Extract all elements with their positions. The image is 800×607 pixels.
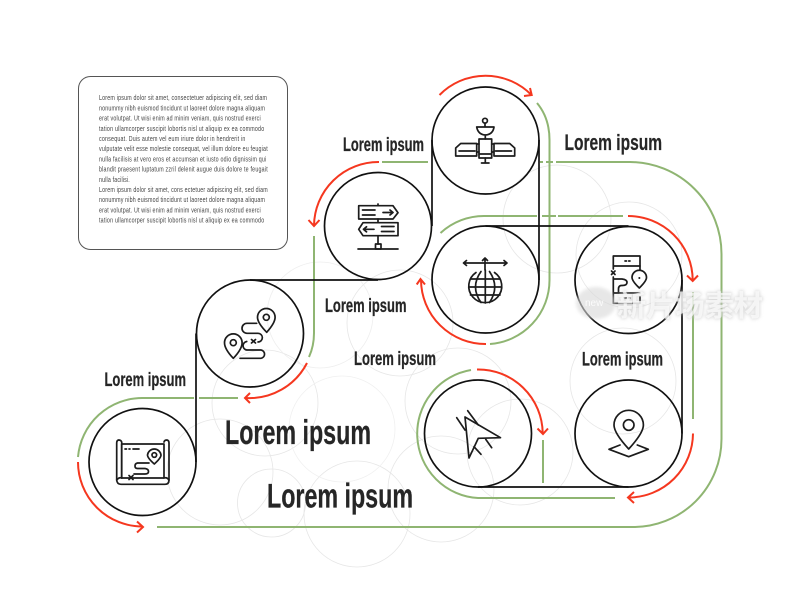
node: signpost [324, 172, 432, 280]
text panel: erat volutpat. Ut wisi enim ad minim veniam, quis nostrud exerci [99, 115, 261, 123]
text panel: nonummy nibh euismod tincidunt ut laoreet dolore magna aliquam [99, 196, 265, 205]
heading: map label: Lorem ipsum [104, 369, 186, 391]
watermark: 新片场素材 [617, 290, 763, 323]
node: globe [432, 226, 539, 333]
icon: globe [464, 258, 507, 303]
icon: phone map [612, 256, 646, 303]
text panel: nonummy nibh euismod tincidunt ut laoreet dolore magna aliquam [99, 105, 265, 113]
icon: cursor [457, 411, 500, 458]
text panel: nulla facilisi. [99, 176, 130, 184]
text panel [78, 76, 288, 250]
node: map pin [575, 380, 682, 487]
watermark: 新片场素材 [617, 290, 763, 323]
heading: signpost label: Lorem ipsum [325, 295, 406, 317]
text panel: consequat. Duis autem vel eum iriure dolor in hendrerit in [99, 135, 246, 143]
node: treasure map [89, 408, 196, 516]
heading: pin label: Lorem ipsum [582, 348, 663, 370]
connector lines [196, 140, 682, 487]
heading: top right label: Lorem ipsum [564, 130, 662, 155]
text panel: tation ullamcorper suscipit lobortis nisl ut aliquip ex ea commodo [99, 217, 264, 225]
node: cursor [424, 380, 532, 487]
node: satellite [432, 87, 539, 194]
icon: map pin [609, 410, 648, 457]
red arrows [78, 76, 698, 533]
heading: cursor label: Lorem ipsum [354, 348, 436, 370]
green route lines [78, 103, 722, 527]
icon: treasure map [117, 440, 169, 484]
node: route [196, 280, 304, 387]
watermark: new [585, 298, 604, 309]
text panel: blandit praesent luptatum zzril delenit augue duis dolore te feugait [99, 166, 268, 174]
text panel: vulputate velit esse molestie consequat, vel illum dolore eu feugiat [99, 145, 268, 154]
heading: large label one: Lorem ipsum [225, 414, 371, 452]
text panel: Lorem ipsum dolor sit amet, consectetuer adipiscing elit, sed diam [99, 94, 267, 103]
text panel: nulla facilisis at vero eros et accumsan et iusto odio dignissim qui [99, 156, 267, 164]
text panel: erat volutpat. Ut wisi enim ad minim veniam, quis nostrud exerci [99, 207, 261, 215]
text panel: tation ullamcorper suscipit lobortis nisl ut aliquip ex ea commodo [99, 125, 264, 133]
icon: route [224, 308, 275, 358]
heading: satellite label: Lorem ipsum [343, 134, 424, 156]
node: phone map [575, 226, 682, 334]
heading: large label two: Lorem ipsum [267, 478, 413, 516]
icon: signpost [358, 204, 398, 249]
text panel: Lorem ipsum dolor sit amet, cons ectetuer adipiscing elit, sed diam [99, 186, 268, 194]
background circles [167, 165, 682, 567]
icon: satellite [456, 118, 515, 163]
crossing gaps [194, 162, 558, 398]
watermark [576, 287, 763, 323]
